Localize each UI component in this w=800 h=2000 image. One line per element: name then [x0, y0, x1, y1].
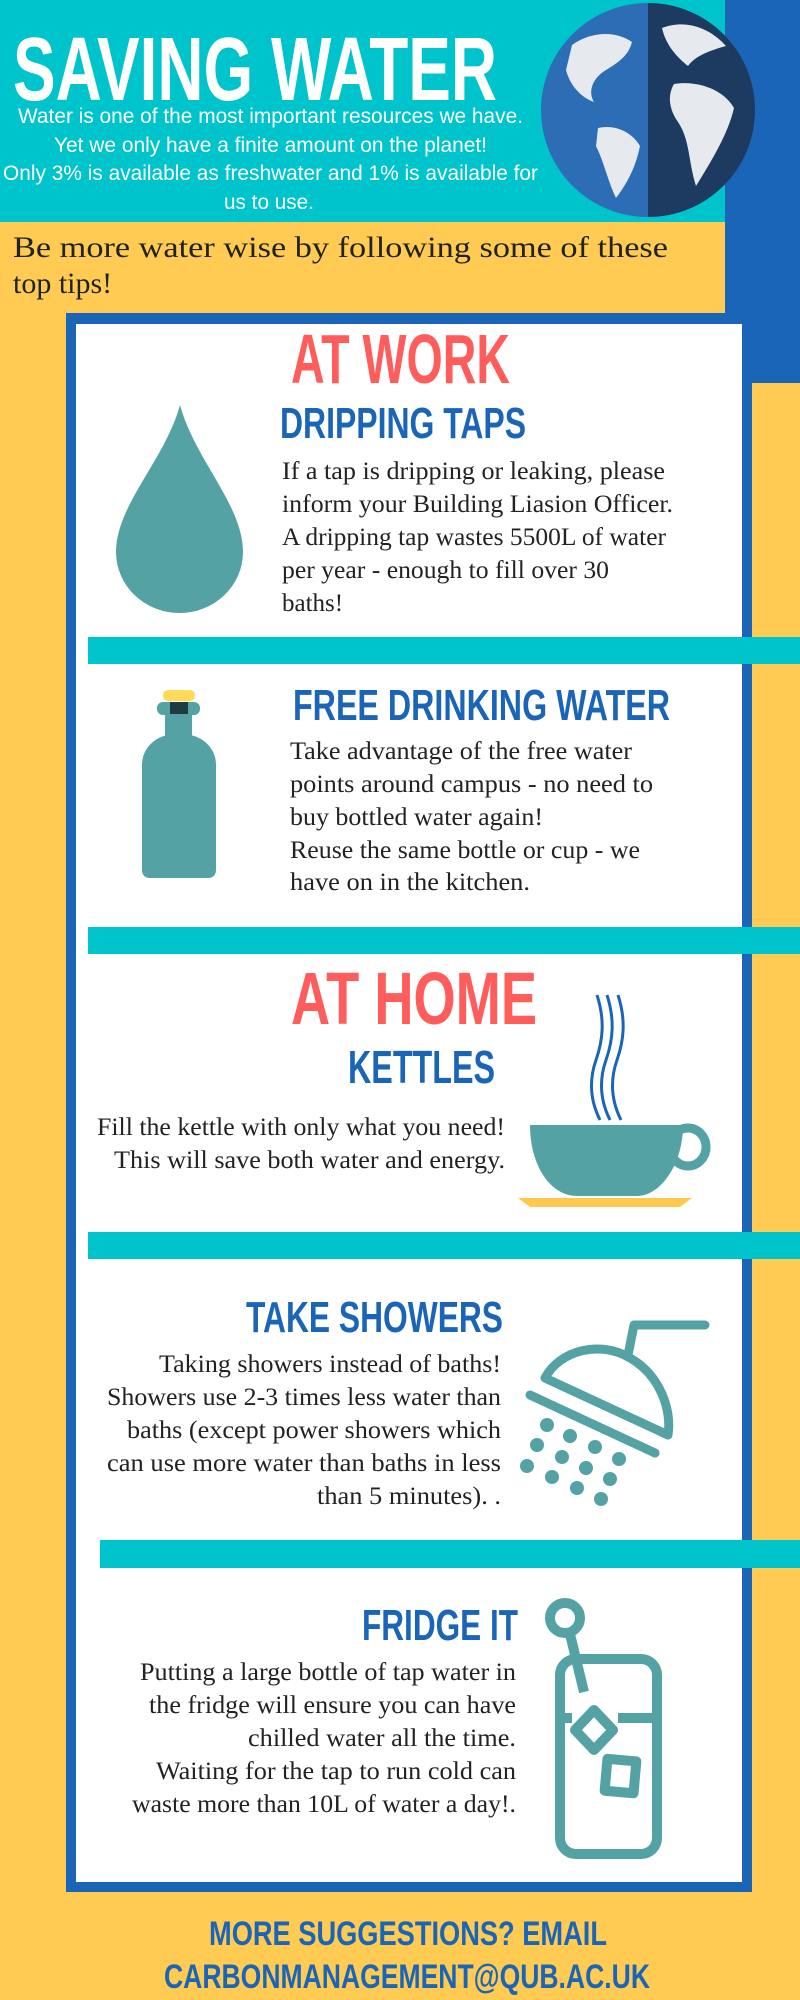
text: free drinking water: Take advantage of the free water: [290, 738, 633, 765]
text: dripping taps: per year - enough to fill over 30: [282, 557, 609, 584]
text: take showers: than 5 minutes). .: [317, 1483, 501, 1510]
icon: bottle: [142, 690, 216, 878]
heading: free drinking water: FREE DRINKING WATER: [293, 681, 670, 730]
text: fridge it: the fridge will ensure you can have: [149, 1692, 516, 1719]
panel: tips: [66, 313, 800, 1892]
footer: contact: [164, 1915, 650, 1996]
text: take showers: Showers use 2-3 times less water than: [107, 1384, 502, 1411]
heading: kettles: KETTLES: [348, 1041, 495, 1093]
intro text: [3, 105, 538, 214]
text: take showers: can use more water than baths in less: [107, 1450, 501, 1477]
text: kettles: This will save both water and energy.: [114, 1147, 505, 1174]
intro text: Water is one of the most important resources we have.: [18, 105, 523, 128]
text: fridge it: Waiting for the tap to run cold can: [156, 1758, 517, 1785]
text: kettles: [97, 1114, 505, 1174]
header band: [0, 0, 800, 383]
heading: at home: AT HOME: [291, 957, 537, 1040]
icon: water drop: [116, 405, 243, 613]
intro tagline: [13, 231, 668, 300]
text: free drinking water: buy bottled water again!: [290, 804, 543, 831]
text: fridge it: [132, 1659, 517, 1818]
text: dripping taps: baths!: [282, 590, 343, 617]
heading: dripping taps: DRIPPING TAPS: [280, 399, 526, 448]
text: free drinking water: points around campus - no need to: [290, 771, 653, 798]
divider bar 4: [100, 1540, 800, 1568]
text: fridge it: waste more than 10L of water a day!.: [132, 1791, 516, 1818]
divider bar 3: [88, 1232, 800, 1259]
text: take showers: Taking showers instead of baths!: [159, 1351, 501, 1378]
intro text: us to use.: [224, 191, 314, 214]
intro text: Only 3% is available as freshwater and 1% is available for: [3, 162, 538, 185]
text: take showers: baths (except power showers which: [127, 1417, 502, 1444]
text: kettles: Fill the kettle with only what you need!: [97, 1114, 505, 1141]
text: dripping taps: A dripping tap wastes 5500L of water: [282, 524, 667, 551]
intro tagline: Be more water wise by following some of these: [13, 231, 668, 264]
text: dripping taps: inform your Building Liasion Officer.: [282, 491, 673, 518]
text: free drinking water: have on in the kitchen.: [290, 869, 530, 896]
intro text: Yet we only have a finite amount on the planet!: [54, 134, 487, 157]
text: take showers: [107, 1351, 502, 1510]
text: fridge it: chilled water all the time.: [248, 1725, 516, 1752]
icon: glass with ice: [550, 1603, 657, 1854]
footer: contact: CARBONMANAGEMENT@QUB.AC.UK: [164, 1958, 650, 1996]
icon: cup with steam: [518, 995, 706, 1207]
divider bar 2: [88, 927, 800, 954]
heading: fridge it: FRIDGE IT: [362, 1601, 518, 1650]
heading: at work: AT WORK: [291, 320, 510, 398]
icon: globe: [540, 0, 758, 220]
divider bar 1: [88, 637, 800, 664]
text: dripping taps: [282, 458, 673, 617]
heading: take showers: TAKE SHOWERS: [246, 1293, 503, 1342]
footer: contact: MORE SUGGESTIONS? EMAIL: [209, 1915, 607, 1953]
text: free drinking water: Reuse the same bottle or cup - we: [290, 837, 640, 864]
text: free drinking water: [290, 738, 653, 896]
text: fridge it: Putting a large bottle of tap water in: [140, 1659, 517, 1686]
icon: shower: [520, 1325, 705, 1506]
text: dripping taps: If a tap is dripping or leaking, please: [282, 458, 665, 485]
title: SAVING WATER: [13, 20, 497, 120]
intro tagline: top tips!: [13, 267, 112, 300]
